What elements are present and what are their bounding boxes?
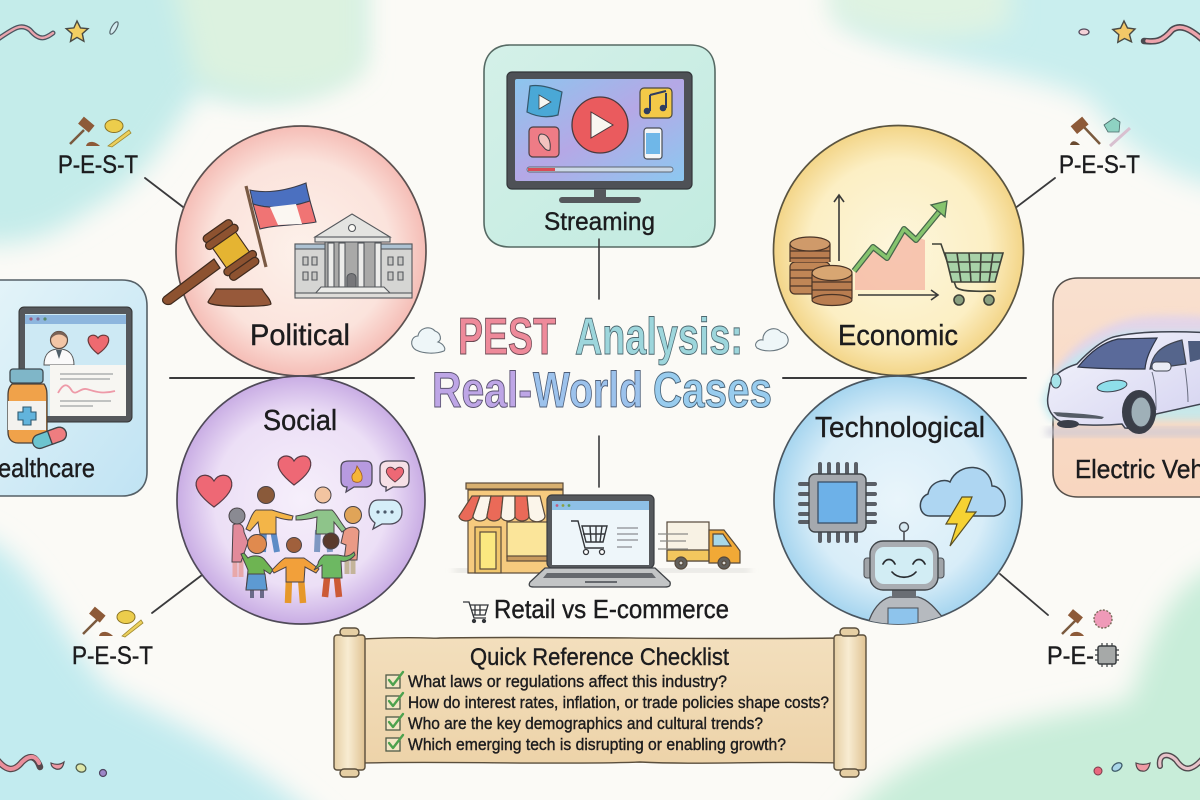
icons: hearts [196,456,311,507]
icon: laptop [529,495,670,587]
icon: microchip [800,464,875,541]
checklist items: How do interest rates, inflation, or trade policies shape costs? [408,693,829,712]
ground shadow [454,569,750,572]
parchment [362,637,838,763]
icon: gavel and gem [1070,117,1130,146]
person: back centre right [296,487,346,552]
label: technological: Technological [815,412,985,444]
circle: social [177,376,425,624]
icon: small cart [463,602,488,622]
icon: right cloud [756,329,788,351]
icon: gavel and coin [83,607,143,637]
circle: economic [774,126,1024,376]
checklist items: Who are the key demographics and cultural trends? [408,714,763,733]
title: World [533,362,643,418]
checklist items [408,672,829,754]
icon: pill bottle [8,369,68,450]
label: p-e-s-t top right [1059,117,1140,179]
icon: gavel and flower [1062,609,1112,636]
icon: coin stacks [790,237,852,306]
label: economic: Economic [838,320,958,352]
icon: gavel [163,217,271,306]
person: front right [314,533,355,597]
title: Cases [653,362,772,418]
person: front left [241,534,273,598]
title: Real- [432,362,532,418]
label: p-e-chip bottom right [1047,609,1119,670]
title: PEST [458,308,556,366]
icon: electric car [1048,332,1200,434]
icon: flag [246,183,316,267]
icon: small chip [1095,643,1119,667]
person: back left [229,508,248,577]
left scroll roll [334,628,365,777]
circle: political [163,126,426,376]
checklist items: Which emerging tech is disrupting or enabling growth? [408,735,786,754]
icon: growth chart [834,195,947,300]
icon: streaming tv [507,72,692,203]
label: p-e-s-t bottom left [72,607,153,670]
label: social: Social [263,405,337,437]
icons: chat bubbles [341,461,409,529]
person: back centre left [246,486,293,552]
label: retail vs e-commerce: Retail vs E-commerce [494,594,729,624]
checklist heading: Quick Reference Checklist [470,644,729,671]
icon: robot [864,522,948,628]
icon: shopping cart [932,244,1003,305]
icon: left cloud [412,328,445,353]
panel: retail vs e-commerce [454,483,750,624]
label: p-e-s-t bottom left: P-E-S-T [72,642,153,670]
person: back right [341,506,362,574]
checklist items: What laws or regulations affect this industry? [408,672,727,691]
icon: cloud and lightning [920,467,1005,546]
label: streaming: Streaming [544,208,655,236]
person: front centre [272,538,319,603]
panel: healthcare case [0,280,147,496]
panel: checklist scroll [334,628,866,777]
icon: delivery truck [658,522,740,569]
label: p-e-s-t top left: P-E-S-T [58,151,138,179]
connector lines [145,178,1055,615]
icons: check boxes [386,672,403,751]
icon: telehealth tablet [19,307,132,422]
label: p-e-s-t top left [58,117,138,179]
icon: government building [295,214,412,298]
car glow [1056,315,1200,400]
circle: technological [774,376,1022,628]
panel: electric vehicles case [1042,278,1200,497]
title [432,308,772,418]
label: political: Political [250,319,350,352]
panel: streaming case [484,45,715,247]
icon: storefront [459,483,563,573]
icon: gavel and coin [70,117,131,147]
icon: people holding hands [229,486,362,603]
label: p-e-s-t top right: P-E-S-T [1059,151,1140,179]
title: Analysis: [575,308,743,366]
label: p-e-chip bottom right: P-E- [1047,642,1094,670]
right scroll roll [834,628,866,777]
